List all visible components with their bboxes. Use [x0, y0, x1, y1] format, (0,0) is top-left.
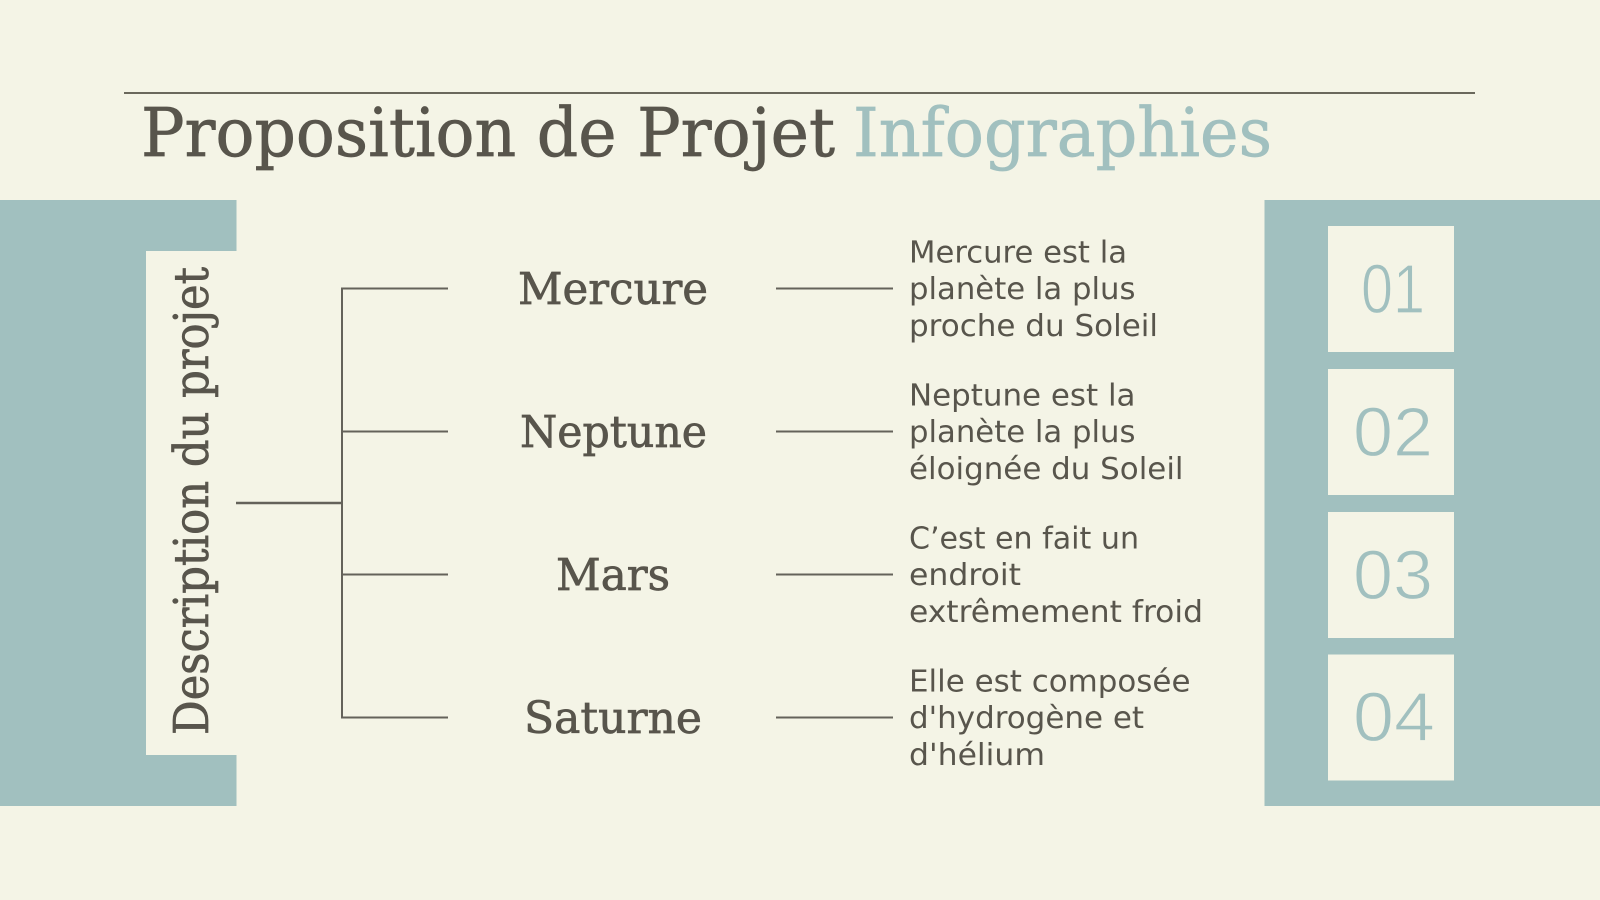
description: Saturne: d'hélium [909, 738, 1045, 773]
number card 03 [1328, 512, 1454, 638]
tree connector [236, 288, 448, 718]
number card 01 [1328, 226, 1454, 352]
number card 04 [1328, 654, 1454, 780]
description: Mercure: proche du Soleil [909, 309, 1158, 344]
description: Saturne: d'hydrogène et [909, 701, 1144, 736]
number card 01: 01 [1361, 250, 1425, 328]
number card 04: 04 [1353, 678, 1435, 756]
connector line [776, 574, 893, 576]
description: Neptune: éloignée du Soleil [909, 452, 1184, 487]
row 1: Mercure [518, 236, 1158, 344]
row 3: Mars [556, 522, 1203, 630]
description: Neptune: Neptune est la [909, 378, 1136, 414]
panel: left teal block [0, 200, 236, 806]
description: Mercure: Mercure est la [909, 236, 1127, 270]
panel: right teal block [1264, 200, 1600, 806]
planet name: Saturne: Saturne [524, 693, 702, 744]
description: Mars: C’est en fait un [909, 522, 1139, 556]
title: Infographies [853, 94, 1272, 172]
description: Saturne: Elle est composée [909, 664, 1190, 700]
number card 02 [1328, 369, 1454, 495]
panel: project description label [146, 251, 236, 755]
row 4: Saturne [524, 664, 1190, 773]
connector line [776, 288, 893, 290]
title rule [124, 92, 1475, 94]
panel: project description label: Description du projet [164, 267, 220, 735]
number card 02: 02 [1353, 393, 1433, 471]
description: Neptune: planète la plus [909, 415, 1136, 450]
number card 03: 03 [1353, 536, 1433, 614]
title: Proposition de Projet [141, 94, 835, 172]
connector line [776, 716, 893, 718]
planet name: Neptune: Neptune [520, 407, 707, 458]
description: Mercure: planète la plus [909, 272, 1136, 307]
planet name: Mercure: Mercure [518, 264, 708, 315]
row 2: Neptune [520, 378, 1184, 487]
planet name: Mars: Mars [556, 550, 670, 601]
title [141, 94, 1272, 172]
description: Mars: endroit [909, 558, 1021, 593]
connector line [776, 430, 893, 432]
description: Mars: extrêmement froid [909, 595, 1203, 630]
